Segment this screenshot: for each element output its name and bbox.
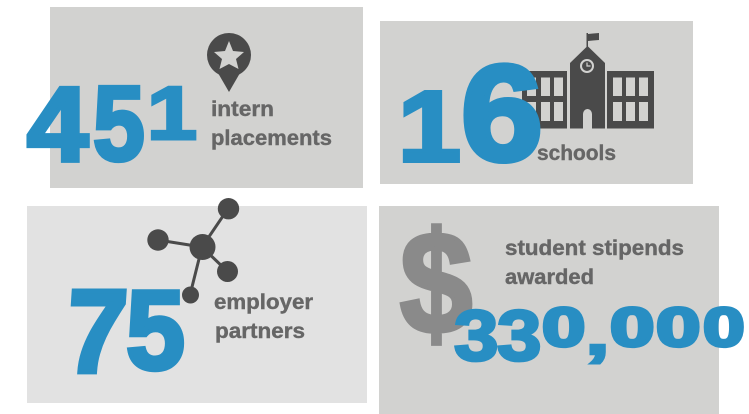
number: 75: [62, 265, 185, 397]
number: 330,000: 0: [610, 296, 654, 358]
label: intern placements: [211, 98, 332, 150]
label: student stipends awarded: student stipends: [505, 237, 684, 260]
icon: map pin with star: [207, 33, 251, 92]
label: student stipends awarded: [505, 237, 684, 289]
label: intern placements: placements: [211, 127, 332, 150]
label: student stipends awarded: awarded: [505, 266, 594, 289]
label: employer partners: [214, 291, 313, 343]
number: 16: 6: [461, 38, 543, 190]
number: 16: 1: [398, 70, 461, 183]
panel: intern placements: [27, 7, 363, 188]
number: 330,000: 0: [703, 296, 745, 358]
number: 330,000: 0: [656, 296, 700, 358]
number: 451: 1: [147, 71, 197, 155]
number: 330,000: 0: [542, 297, 585, 358]
label: employer partners: partners: [215, 320, 305, 343]
number: 330,000: [454, 296, 745, 376]
number: 75: 5: [126, 268, 185, 394]
label: schools: schools: [537, 142, 616, 165]
icon: dollar sign: $: [400, 202, 472, 365]
panel: student stipends: [379, 202, 745, 414]
number: 330,000: 3: [454, 297, 498, 376]
icon: school building: [522, 33, 654, 128]
number: 451: 5: [93, 65, 145, 183]
number: 16: [398, 38, 543, 190]
panel: schools: [380, 21, 693, 190]
panel: employer partners: [27, 198, 367, 403]
number: 330,000: 3: [497, 297, 541, 376]
number: 451: 4: [27, 65, 88, 184]
number: 451: [27, 65, 197, 184]
number: 75: 7: [62, 265, 131, 397]
number: 330,000: ,: [585, 301, 610, 367]
label: intern placements: intern: [211, 98, 274, 121]
icon: network nodes: [147, 198, 239, 304]
label: employer partners: employer: [214, 291, 313, 314]
